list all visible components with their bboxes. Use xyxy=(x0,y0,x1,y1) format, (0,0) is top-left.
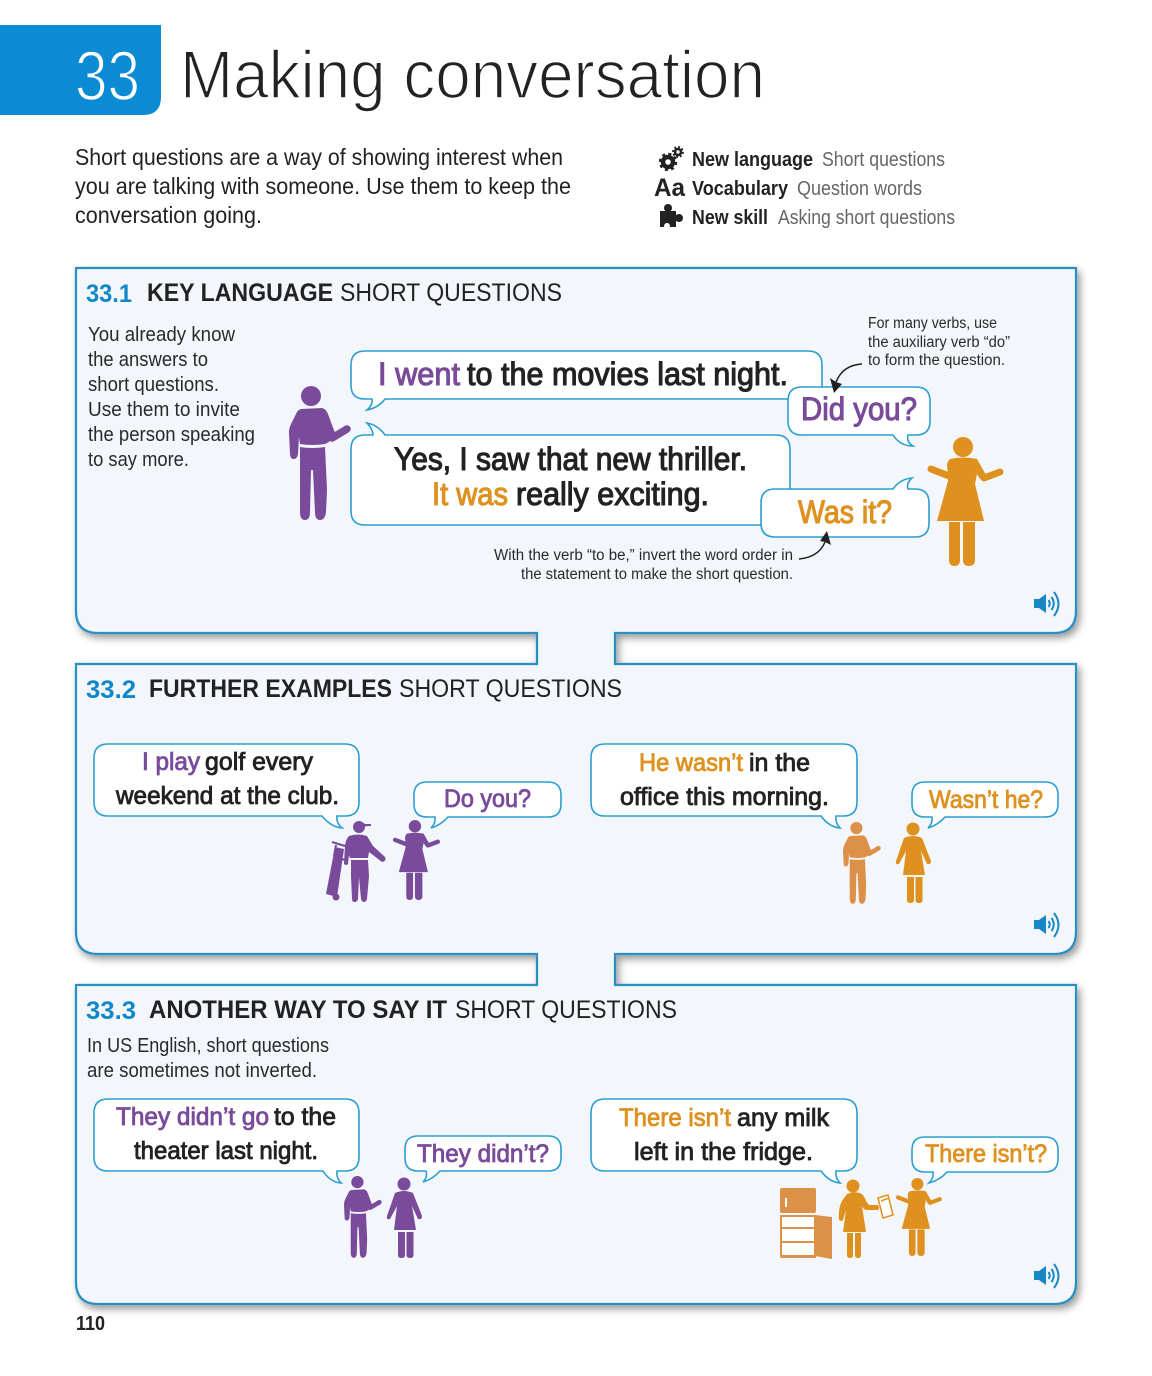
speech bubble: Yes, I saw: really exciting. xyxy=(516,476,709,512)
figure: man xyxy=(344,1176,379,1258)
icon: gears xyxy=(660,147,683,170)
speech bubble: He wasn't: in the xyxy=(749,749,810,777)
intro text xyxy=(75,144,571,228)
figure: man xyxy=(843,822,878,904)
intro text: Short questions are a way of showing interest when xyxy=(75,144,563,170)
speech bubble: They didn't? xyxy=(405,1136,561,1182)
explanatory text: In US English, short questions xyxy=(87,1035,329,1057)
speech bubble: Yes, I saw xyxy=(351,423,790,525)
heading 33.3: ANOTHER WAY TO SAY IT xyxy=(149,996,447,1024)
intro text: you are talking with someone. Use them to keep the xyxy=(75,173,571,199)
icon: audio xyxy=(1034,913,1058,937)
panel: 33.2 further examples xyxy=(86,675,1058,937)
title: Making conversation xyxy=(180,37,765,113)
heading 33.3: 33.3 xyxy=(86,997,136,1025)
panel: 33.3 another way to say it xyxy=(86,996,1058,1288)
explanatory text: the person speaking xyxy=(88,424,255,446)
speech bubble: He wasn't xyxy=(591,744,857,828)
annotation: auxiliary verb: the auxiliary verb “do” xyxy=(868,334,1010,351)
speech bubble: I went: I went xyxy=(378,356,460,392)
speech bubble: I play golf: golf every xyxy=(205,748,313,776)
figure: woman xyxy=(387,1178,422,1258)
intro text: conversation going. xyxy=(75,202,262,228)
speech bubble: They didn't?: They didn’t? xyxy=(417,1140,549,1168)
speech bubble: There isn't any milk: There isn’t xyxy=(619,1104,731,1132)
annotation: verb to be xyxy=(494,547,793,583)
speech bubble: There isn't any milk: left in the fridge. xyxy=(634,1138,813,1166)
new language row: Short questions xyxy=(822,149,945,171)
explanatory text: You already know xyxy=(88,324,236,346)
explanatory text: short questions. xyxy=(88,374,219,396)
lesson summary list xyxy=(654,147,955,229)
speech bubble: I went: to the movies last night. xyxy=(467,356,788,392)
panels outline xyxy=(76,268,1076,1304)
speech bubble: There isn't? xyxy=(912,1137,1058,1183)
speech bubble: They didn't go: to the xyxy=(274,1103,336,1131)
speech bubble: He wasn't: He wasn’t xyxy=(639,749,743,777)
heading 33.2 xyxy=(86,675,622,704)
speech bubble: Do you?: Do you? xyxy=(444,785,531,813)
speech bubble: He wasn't: office this morning. xyxy=(620,783,829,811)
figure: woman shrugging xyxy=(395,820,438,900)
speech bubble: Yes, I saw: Yes, I saw that new thriller. xyxy=(394,441,747,477)
new skill row: New skill xyxy=(692,207,768,229)
vocabulary row: Vocabulary xyxy=(692,178,789,200)
new language row xyxy=(692,149,945,171)
annotation: auxiliary verb: to form the question. xyxy=(868,352,1005,369)
explanatory text xyxy=(88,324,255,471)
speech bubble: There isn't any milk: any milk xyxy=(737,1104,830,1132)
speech bubble: I play golf: I play xyxy=(142,748,200,776)
speech bubble: I play golf xyxy=(94,744,359,828)
icon: audio xyxy=(1034,1264,1058,1288)
speech bubble: There isn't any milk xyxy=(591,1099,857,1183)
speech bubble: Wasn't he?: Wasn’t he? xyxy=(929,786,1043,814)
heading 33.3 xyxy=(86,996,677,1025)
figure: woman shrugging xyxy=(898,1178,940,1256)
vocabulary row xyxy=(692,178,922,200)
vocabulary row: Question words xyxy=(797,178,922,200)
speech bubble: Did you?: Did you? xyxy=(801,391,917,427)
annotation: verb to be: the statement to make the short question. xyxy=(521,566,793,583)
speech bubble: They didn't go: They didn’t go xyxy=(116,1103,269,1131)
explanatory text: the answers to xyxy=(88,349,208,371)
speech bubble: There isn't?: There isn’t? xyxy=(925,1140,1047,1168)
arrow: to Did you xyxy=(830,364,862,393)
speech bubble: Do you? xyxy=(414,782,561,828)
heading 33.2: 33.2 xyxy=(86,676,136,704)
heading 33.2: FURTHER EXAMPLES xyxy=(149,675,392,703)
icon: audio xyxy=(1034,592,1058,616)
heading 33.2: SHORT QUESTIONS xyxy=(399,675,622,703)
icon: vocabulary Aa: Aa xyxy=(654,174,686,202)
speech bubble: Was it?: Was it? xyxy=(798,494,892,530)
speech bubble: I play golf: weekend at the club. xyxy=(115,782,339,810)
page number: 110 xyxy=(76,1313,105,1335)
figure: woman shrugging xyxy=(931,437,1000,566)
icon: puzzle piece xyxy=(660,204,683,227)
figure: man speaking xyxy=(289,386,347,520)
explanatory text: are sometimes not inverted. xyxy=(87,1060,317,1082)
icon: fridge xyxy=(780,1188,832,1259)
heading 33.1: SHORT QUESTIONS xyxy=(340,279,562,307)
panel: 33.1 key language xyxy=(86,279,1058,616)
speech bubble: Was it? xyxy=(761,478,929,537)
speech bubble: Wasn't he? xyxy=(912,782,1058,828)
icon: milk carton xyxy=(878,1195,893,1218)
figure: golfer with bag xyxy=(326,821,386,902)
heading 33.1: KEY LANGUAGE xyxy=(147,279,333,307)
heading 33.1: 33.1 xyxy=(86,280,132,308)
explanatory text: to say more. xyxy=(88,449,189,471)
explanatory text xyxy=(87,1035,329,1082)
arrow: to Was it xyxy=(799,531,831,559)
speech bubble: They didn't go xyxy=(94,1099,359,1183)
speech bubble: Did you? xyxy=(788,387,930,446)
chapter number tab: 33 xyxy=(75,37,140,115)
annotation: auxiliary verb xyxy=(868,315,1010,369)
new skill row xyxy=(692,207,955,229)
heading 33.1 xyxy=(86,279,562,308)
heading 33.3: SHORT QUESTIONS xyxy=(455,996,677,1024)
speech bubble: I went xyxy=(351,351,822,410)
chapter number tab xyxy=(0,25,161,115)
annotation: verb to be: With the verb “to be,” invert the word order in xyxy=(494,547,793,564)
speech bubble: Yes, I saw: It was xyxy=(432,476,508,512)
speech bubble: They didn't go: theater last night. xyxy=(134,1137,318,1165)
annotation: auxiliary verb: For many verbs, use xyxy=(868,315,997,332)
new skill row: Asking short questions xyxy=(778,207,955,229)
explanatory text: Use them to invite xyxy=(88,399,240,421)
figure: woman xyxy=(896,822,931,903)
figure: woman holding milk xyxy=(839,1180,879,1258)
new language row: New language xyxy=(692,149,813,171)
